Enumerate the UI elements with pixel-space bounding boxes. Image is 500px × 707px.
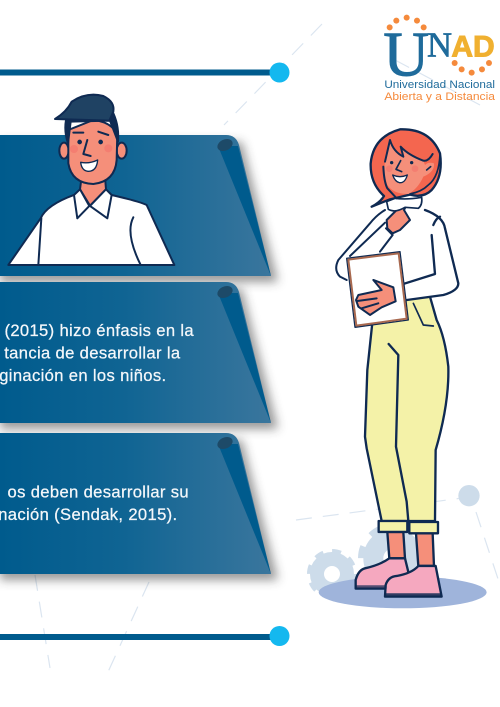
banner 2 bbox=[0, 282, 278, 429]
banner 2 text bbox=[0, 321, 194, 385]
bottom line with dot bbox=[0, 626, 290, 646]
woman legs and shoes bbox=[319, 297, 487, 608]
banner 1 bbox=[0, 135, 278, 282]
logo dots bbox=[387, 15, 492, 76]
UNAD logo bbox=[383, 15, 496, 103]
top line with dot bbox=[0, 62, 290, 82]
woman torso with clipboard bbox=[336, 202, 458, 327]
logo letters: U bbox=[383, 19, 429, 89]
banner 3 text bbox=[0, 482, 189, 524]
banner 3 bbox=[0, 433, 278, 580]
clipboard bbox=[347, 252, 408, 327]
gears and backdrop circle bbox=[310, 485, 480, 596]
man illustration bbox=[8, 95, 174, 265]
banner 3 text: os deben desarrollar su bbox=[8, 482, 189, 502]
woman head bbox=[371, 129, 441, 211]
holding hand bbox=[356, 280, 396, 315]
logo caption: Universidad Nacional bbox=[384, 79, 495, 91]
banner 2 text: tancia de desarrollar la bbox=[4, 344, 181, 362]
pointing hand bbox=[387, 202, 410, 233]
logo caption second line: Abierta y a Distancia bbox=[384, 91, 496, 103]
banner 2 text: (2015) hizo énfasis en la bbox=[4, 321, 194, 340]
banner 3 text: nación (Sendak, 2015). bbox=[0, 505, 178, 524]
UNAD logo: N bbox=[427, 27, 452, 65]
banner 2 text: ginación en los niños. bbox=[0, 366, 166, 385]
UNAD logo: AD bbox=[451, 31, 495, 64]
